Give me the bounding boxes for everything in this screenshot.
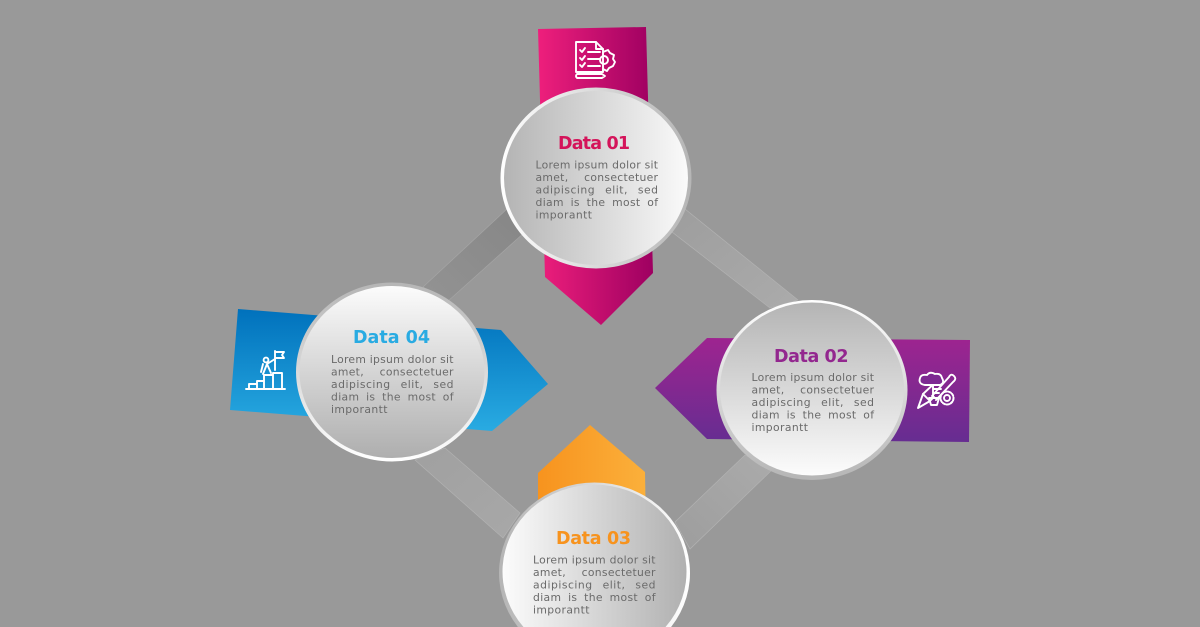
text block: data 01: imporantt: [536, 208, 592, 222]
ribbon arrow: data 03: [538, 425, 646, 530]
connector: data 03 to data 04: [415, 448, 520, 538]
text block: data 03: Lorem ipsum dolor sit: [533, 554, 656, 566]
circle: data 01: [500, 88, 692, 268]
heading: data 02: Data 02: [774, 347, 848, 367]
heading: data 03: Data 03: [556, 529, 631, 549]
circle: data 02: [716, 300, 908, 480]
connector: data 01 to data 02: [672, 205, 798, 308]
connector: data 02 to data 03: [675, 455, 772, 549]
ribbon arrow: data 01: [538, 27, 653, 325]
text block: data 01: amet, consectetuer: [536, 171, 659, 184]
text block: data 02: Lorem ipsum dolor sit: [752, 371, 874, 384]
text block: data 04: diam is the most of: [331, 390, 454, 404]
text block: data 02: amet, consectetuer: [752, 384, 875, 396]
text block: data 03: adipiscing elit, sed: [533, 578, 656, 592]
text block: data 02: diam is the most of: [752, 408, 874, 422]
icon: checklist document with gear: [576, 42, 615, 78]
text block: data 01: diam is the most of: [536, 196, 658, 209]
icon: pencil, bulb and gear: [918, 373, 955, 408]
heading: data 04: Data 04: [353, 328, 430, 348]
icon: climber with flag on steps: [246, 351, 285, 389]
text block: data 03: [533, 554, 656, 616]
ribbon arrow: data 02: [655, 338, 970, 442]
text block: data 01: adipiscing elit, sed: [536, 184, 658, 196]
text block: data 01: [536, 158, 659, 222]
heading: data 01: Data 01: [558, 134, 630, 154]
text block: data 04: adipiscing elit, sed: [331, 378, 454, 391]
connector: data 04 to data 01: [423, 208, 525, 302]
text block: data 02: imporantt: [752, 421, 808, 434]
text block: data 02: adipiscing elit, sed: [752, 396, 874, 409]
text block: data 03: amet, consectetuer: [533, 566, 656, 579]
text block: data 03: imporantt: [533, 604, 590, 616]
text block: data 01: Lorem ipsum dolor sit: [536, 158, 658, 172]
text block: data 04: amet, consectetuer: [331, 366, 454, 378]
circle: data 04: [296, 282, 488, 462]
text block: data 04: imporantt: [331, 403, 388, 416]
text block: data 04: [331, 353, 454, 416]
text block: data 04: Lorem ipsum dolor sit: [331, 353, 454, 366]
text block: data 02: [752, 371, 875, 434]
circle: data 03: [499, 482, 690, 627]
ribbon arrow: data 04: [230, 309, 548, 431]
text block: data 03: diam is the most of: [533, 591, 656, 604]
